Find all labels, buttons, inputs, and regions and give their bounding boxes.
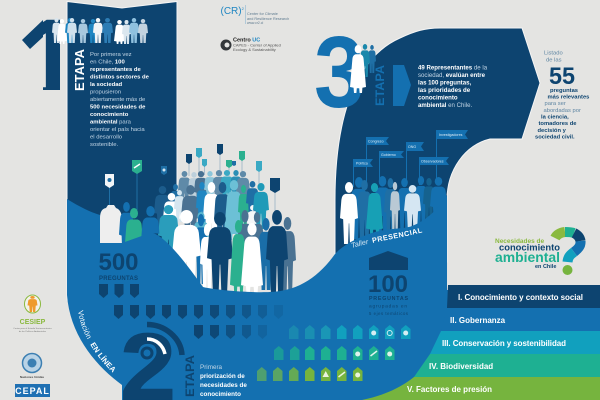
logo: Necesidades de conocimiento ambiental en Chile: Necesidades de xyxy=(495,238,545,245)
flags: stakeholder groups: Gobierno xyxy=(381,153,396,157)
logo: CR2: 2 xyxy=(242,6,245,11)
stat: 500 preguntas: PREGUNTAS xyxy=(99,276,138,282)
text block: 55 preguntas xyxy=(535,50,589,140)
logo: Necesidades de conocimiento ambiental en Chile: conocimiento xyxy=(499,242,561,252)
text block: stage 3 description: ambiental en Chile. xyxy=(418,102,472,109)
logo: Necesidades de conocimiento ambiental en Chile xyxy=(495,232,581,275)
label: I: I. Conocimiento y contexto social xyxy=(458,293,583,302)
logo: CESIEP: Centro para el Estudio Socioeconómico xyxy=(13,327,52,330)
text block: 55 preguntas: sociedad civil. xyxy=(535,134,575,140)
text block: stage 1 description: sostenible. xyxy=(90,142,119,148)
flags: stakeholder groups: Observadores xyxy=(421,160,444,164)
flags: stakeholder groups: Política xyxy=(356,162,368,166)
logo: Centro UC: CAPES - Center of Applied xyxy=(233,42,281,48)
bar: IV xyxy=(414,354,600,377)
text block: stage 1 description: orientar el país hacia xyxy=(90,127,145,133)
logo: Necesidades de conocimiento ambiental en Chile: en Chile xyxy=(535,264,556,270)
panel: dark ribbon stage 1 xyxy=(67,2,177,300)
shields: third row xyxy=(194,325,267,339)
crowd: central group of silhouettes xyxy=(154,170,296,294)
text block: stage 1 description: la sociedad xyxy=(90,82,122,88)
stat: 100 preguntas: agrupadas en xyxy=(369,304,407,310)
stat: 100 preguntas: PREGUNTAS xyxy=(369,296,408,302)
text block: 55 preguntas: de las xyxy=(546,58,562,64)
shape: stage 3 tab arrow xyxy=(393,65,411,106)
logo: CESIEP: CESIEP xyxy=(20,319,46,326)
text block: 55 preguntas: la ciencia, xyxy=(541,114,569,120)
logo: CR2: www.cr2.cl xyxy=(247,21,263,25)
text block: stage 2 description: Primera xyxy=(200,364,223,371)
logo: CR2 xyxy=(220,5,289,25)
text block: stage 2 description: necesidades de xyxy=(200,382,247,389)
crowd: figures on numeral 3 xyxy=(350,44,376,93)
text block: stage 3 description: sociedad, evalúan entre xyxy=(418,72,485,79)
label: IV: IV. Biodiversidad xyxy=(429,362,493,371)
bar: II xyxy=(441,308,600,331)
text block: 55 preguntas: decisión y xyxy=(538,128,567,134)
numeral 1 xyxy=(22,20,60,90)
numeral 3: 3 xyxy=(314,17,365,129)
logo: Necesidades de conocimiento ambiental en Chile: ambiental xyxy=(495,250,560,265)
text block: 55 preguntas: 55 xyxy=(549,63,575,90)
crowd: stage 1 header figures xyxy=(52,18,148,44)
shields: 500 preguntas row xyxy=(99,284,139,298)
text block: stage 1 description: distintos sectores de xyxy=(90,74,150,80)
text block: stage 3 description: conocimiento xyxy=(418,94,458,102)
text: Taller presencial: Taller PRESENCIAL xyxy=(351,228,422,248)
text block: 55 preguntas: abordadas por xyxy=(544,108,581,114)
text block: stage 1 description: el desarrollo xyxy=(90,134,123,140)
label: V: V. Factores de presión xyxy=(407,385,492,394)
flags: stakeholder groups xyxy=(353,130,468,187)
logo: Centro UC: Centro UC xyxy=(233,38,260,44)
text block: stage 1 description: representantes de xyxy=(90,67,141,73)
text block: 55 preguntas: tomadores de xyxy=(538,121,577,127)
icon: segmented question mark xyxy=(555,232,581,275)
logo: United Nations: Naciones Unidas xyxy=(20,375,44,379)
bar: III xyxy=(430,331,600,354)
stat: 100 preguntas xyxy=(368,251,408,316)
flags: stakeholder groups: Investigadores xyxy=(439,133,463,137)
text block: stage 2 description: conocimiento xyxy=(200,391,241,398)
text block: stage 1 description: 500 necesidades de xyxy=(90,104,146,110)
logo: CR2: Center for Climate xyxy=(247,12,278,16)
crowd: foreground busts xyxy=(100,202,160,243)
logo: CESIEP: de las Políticas Ambientales xyxy=(19,330,47,333)
flags: stakeholder groups: ONG xyxy=(408,145,416,149)
text block: stage 2 description: priorización de xyxy=(200,373,245,380)
text block: stage 1 description: propusieron xyxy=(90,90,121,96)
panel: dark arch stage 3 with arrow xyxy=(335,28,540,262)
text block: 55 preguntas: más relevantes xyxy=(548,94,589,100)
crowd: stage 3 participants xyxy=(340,176,447,244)
text: Votación en línea: Votación EN LÍNEA xyxy=(78,310,115,373)
text block: stage 1 description: ambiental para xyxy=(90,120,131,126)
stat: 100 preguntas: 100 xyxy=(368,271,408,298)
flags: stakeholder groups: Congreso xyxy=(368,140,384,144)
text block: stage 3 description: las 100 preguntas, xyxy=(418,80,471,86)
logo: CR2: (CR) xyxy=(220,6,242,17)
text block: stage 3 description: 49 Representantes de la xyxy=(418,64,487,72)
logo: Centro UC: Ecology & Sustainability xyxy=(233,47,276,52)
text block: stage 1 description: conocimiento xyxy=(90,112,129,118)
crowd: placards with poles xyxy=(105,144,280,220)
icons: green home row xyxy=(257,367,362,381)
label: ETAPA stage 3: ETAPA xyxy=(375,65,387,106)
logo: CEPAL: CEPAL xyxy=(15,386,50,396)
label: ETAPA stage 1: ETAPA xyxy=(73,49,87,91)
icons: green-teal home row xyxy=(274,346,394,360)
panel: blue bowl base xyxy=(67,195,600,400)
label: II: II. Gobernanza xyxy=(450,316,506,325)
shields: second row xyxy=(114,305,283,319)
logo: United Nations xyxy=(20,354,44,379)
icons: teal home row xyxy=(289,325,410,339)
text block: 55 preguntas: preguntas xyxy=(550,88,578,94)
stat: 500 preguntas: 500 xyxy=(98,249,138,276)
logo: CESIEP xyxy=(13,295,52,333)
stat: 100 preguntas: 5 ejes temáticos xyxy=(369,311,408,316)
panel: theme bars xyxy=(362,285,600,400)
text block: stage 1 description: Por primera vez xyxy=(90,52,132,58)
bar: I xyxy=(447,285,600,308)
bar: V xyxy=(362,377,600,400)
text block: stage 3 description: las prioridades de xyxy=(418,87,471,94)
label: ETAPA stage 2: ETAPA xyxy=(185,355,197,397)
text block: 55 preguntas: Listado xyxy=(544,50,563,56)
label: III: III. Conservación y sostenibilidad xyxy=(442,339,566,348)
text block: stage 1 description: abiertamente más de xyxy=(90,97,146,103)
logo: Centro UC xyxy=(220,38,281,52)
logo: CR2: and Resilience Research xyxy=(247,17,289,21)
text block: 55 preguntas: para ser xyxy=(544,101,566,107)
text block: stage 1 description: en Chile, 100 xyxy=(90,60,125,66)
